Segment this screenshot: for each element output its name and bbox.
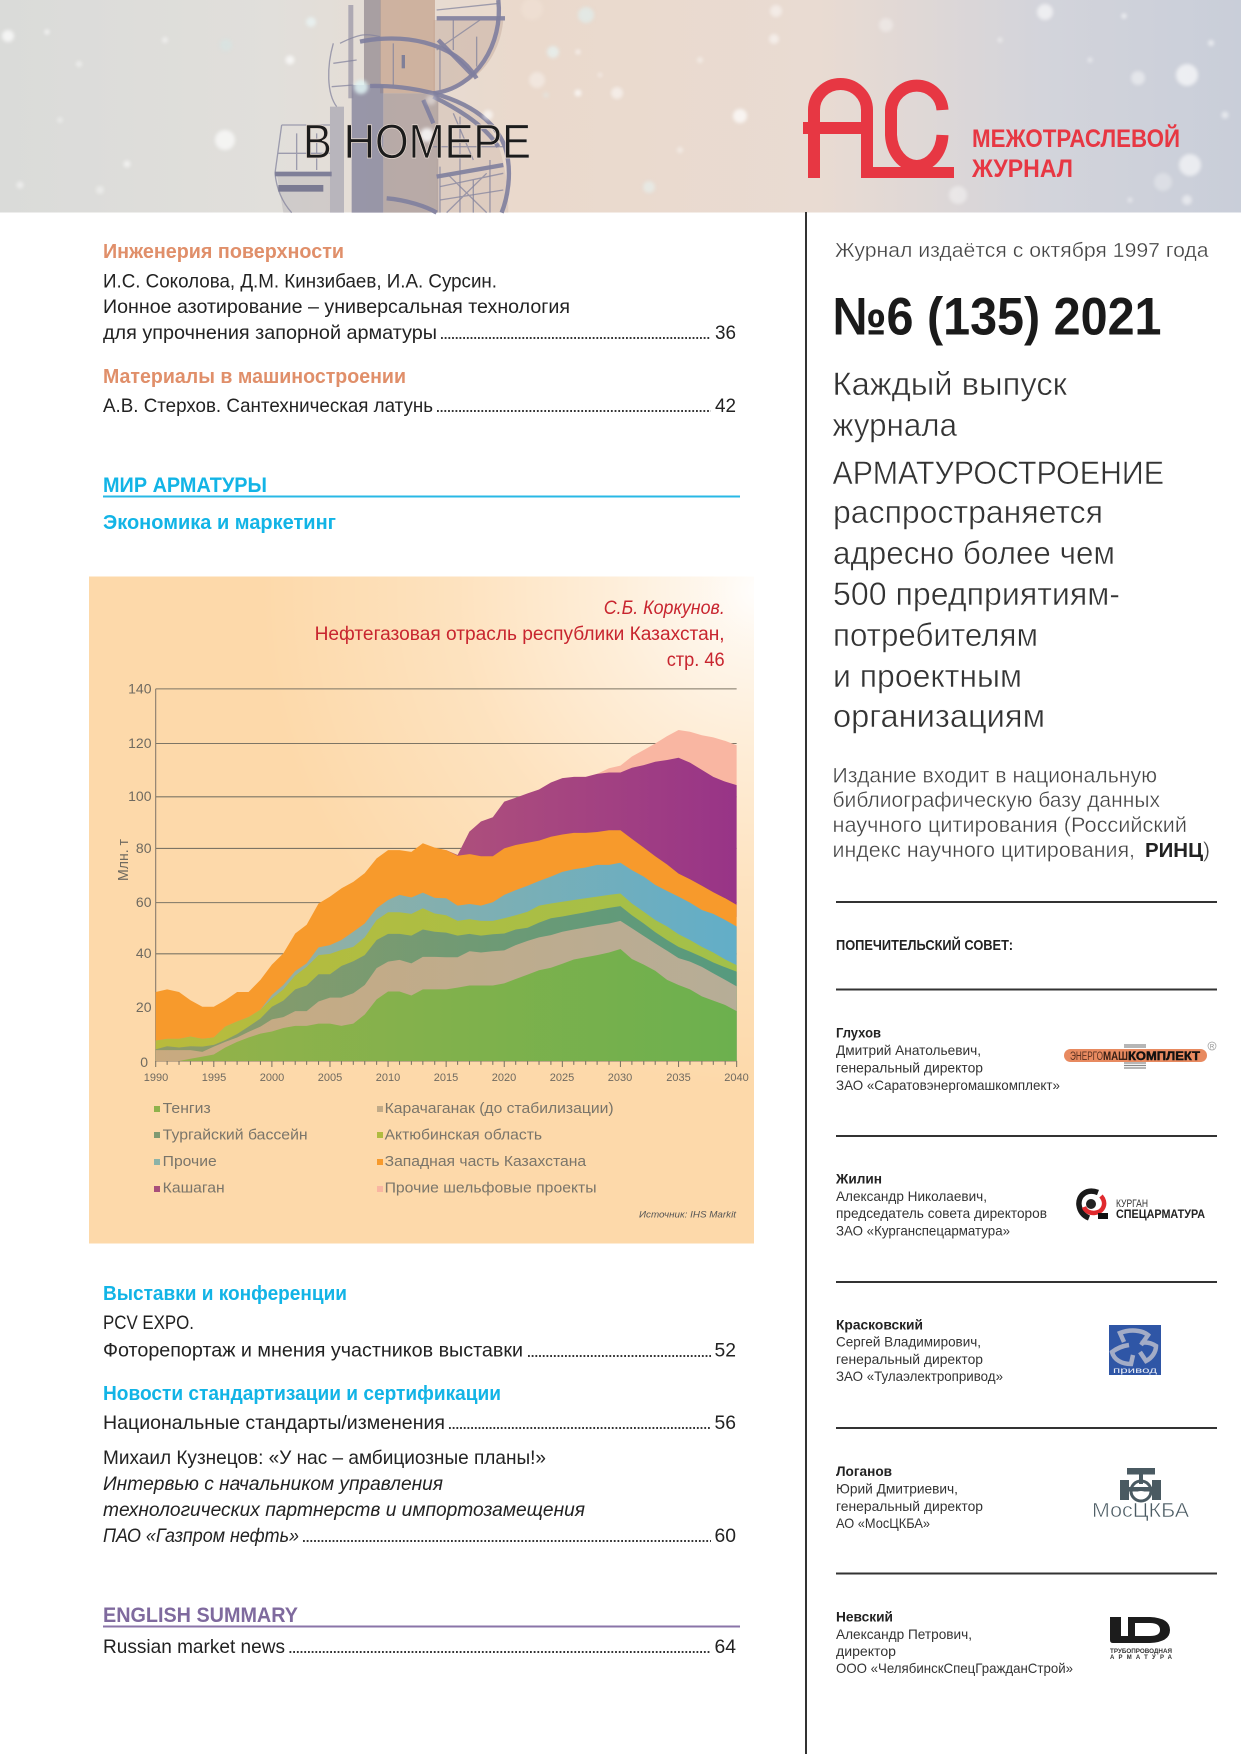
- board member: Логанов: Логанов: [836, 1463, 892, 1479]
- board member: Глухов: ЗАО «Саратовэнергомашкомплект»: [836, 1077, 1060, 1093]
- chart caption: Нефтегазовая отрасль республики Казахстан,: [315, 624, 725, 645]
- chart legend: [154, 1100, 614, 1197]
- logo: МосЦКБА: [1092, 1468, 1190, 1522]
- series: актюбинская область: [156, 894, 737, 1061]
- x axis labels: 1995: [202, 1072, 226, 1084]
- chart legend: Прочие: [163, 1153, 217, 1170]
- contents: Инженерия поверхности: Инженерия поверхности: [103, 241, 344, 263]
- board member: Логанов: Юрий Дмитриевич,: [836, 1480, 958, 1496]
- section: English summary: ENGLISH SUMMARY: [103, 1604, 298, 1627]
- y axis labels: Млн. т: [116, 839, 132, 881]
- contents: Инженерия поверхности: [103, 241, 736, 344]
- right column: since 1997: Журнал издаётся с октября 1997 года: [835, 240, 1210, 262]
- x axis labels: 2040: [724, 1072, 749, 1084]
- logo: Курган Спецарматура: КУРГАН: [1116, 1198, 1148, 1210]
- board member: Невский: Александр Петрович,: [836, 1626, 972, 1642]
- contents: Инженерия поверхности: Ионное азотирование – универсальная технология: [103, 296, 570, 318]
- chart legend: Кашаган: [163, 1180, 225, 1197]
- logo caption: ЖУРНАЛ: [971, 155, 1073, 183]
- RINC statement: ): [1203, 839, 1210, 862]
- subheading: Экономика и маркетинг: Экономика и маркетинг: [103, 512, 336, 534]
- board member: Глухов: Глухов: [836, 1025, 881, 1041]
- logo: Энергомашкомплект: ЭНЕРГО: [1070, 1051, 1103, 1063]
- board member: Красковский: [836, 1316, 1003, 1384]
- logo caption: МЕЖОТРАСЛЕВОЙ: [972, 123, 1180, 153]
- board member: Логанов: [836, 1463, 983, 1531]
- y axis labels: 80: [136, 840, 152, 856]
- contents: Выставки и конференции: Выставки и конференции: [103, 1283, 347, 1305]
- board member: Красковский: генеральный директор: [836, 1351, 983, 1367]
- y axis labels: 140: [128, 680, 152, 696]
- chart legend: Тенгиз: [163, 1100, 211, 1117]
- contents: Выставки и конференции: PCV EXPO.: [103, 1312, 194, 1334]
- chart caption: [315, 598, 725, 671]
- board heading: ПОПЕЧИТЕЛЬСКИЙ СОВЕТ:: [836, 936, 1013, 954]
- issue number: №6 (135) 2021: [832, 288, 1162, 347]
- logo: Энергомашкомплект: [1064, 1042, 1216, 1068]
- board member: Глухов: генеральный директор: [836, 1060, 983, 1076]
- section heading: Мир арматуры: МИР АРМАТУРЫ: [103, 474, 267, 497]
- board member: Невский: Невский: [836, 1609, 893, 1625]
- board member: Жилин: [835, 1171, 1047, 1239]
- board member: Глухов: Дмитрий Анатольевич,: [836, 1042, 981, 1058]
- series: западная часть Казахстана: [156, 830, 737, 1061]
- board member: Жилин: председатель совета директоров: [836, 1205, 1047, 1221]
- contents: Новости стандартизации и сертификации: [103, 1383, 736, 1547]
- logo: LD Трубопроводная арматура: ТРУБОПРОВОДНАЯ: [1110, 1648, 1172, 1655]
- contents: Новости стандартизации и сертификации: 60: [714, 1525, 736, 1547]
- y axis labels: 20: [136, 999, 152, 1015]
- RINC statement: РИНЦ: [1145, 840, 1203, 862]
- x axis labels: 2030: [608, 1072, 632, 1084]
- distribution statement: АРМАТУРОСТРОЕНИЕ: [832, 455, 1164, 491]
- tower photo: [275, 0, 509, 213]
- logo: LD Трубопроводная арматура: [1110, 1617, 1173, 1661]
- distribution statement: 500 предприятиям-: [833, 576, 1120, 612]
- logo: Курган Спецарматура: [1079, 1191, 1205, 1221]
- RINC statement: научного цитирования (Российский: [832, 814, 1187, 837]
- section: English summary: [103, 1604, 740, 1658]
- chart legend: Западная часть Казахстана: [385, 1153, 587, 1170]
- contents: Инженерия поверхности: И.С. Соколова, Д.М. Кинзибаев, И.А. Сурсин.: [103, 270, 497, 292]
- board member: Жилин: Жилин: [835, 1171, 882, 1187]
- section: English summary: Russian market news: [103, 1636, 285, 1658]
- x axis labels: 2010: [376, 1072, 400, 1084]
- contents: Материалы в машиностроении: А.В. Стерхов. Сантехническая латунь: [103, 395, 433, 417]
- contents: Инженерия поверхности: 36: [715, 322, 736, 344]
- y axis labels: 60: [136, 894, 152, 910]
- logo caption: [971, 123, 1180, 183]
- plot areas: [156, 689, 737, 1067]
- contents: Выставки и конференции: [103, 1283, 736, 1362]
- board member: Жилин: ЗАО «Курганспецарматура»: [836, 1223, 1010, 1239]
- column divider: [805, 212, 807, 1754]
- x axis labels: 2020: [492, 1072, 516, 1084]
- chart panel: [89, 576, 754, 1244]
- logo: Энергомашкомплект: МАШ: [1103, 1051, 1128, 1063]
- contents: Материалы в машиностроении: [103, 366, 736, 417]
- logo: Привод: привод: [1113, 1365, 1157, 1375]
- board member: Жилин: Александр Николаевич,: [836, 1188, 987, 1204]
- contents: Новости стандартизации и сертификации: 56: [714, 1412, 736, 1434]
- RINC statement: индекс научного цитирования,: [832, 839, 1135, 862]
- series: тургайский бассейн: [156, 906, 737, 1061]
- series: тенгиз: [156, 949, 737, 1061]
- RINC statement: Издание входит в национальную: [832, 765, 1157, 788]
- board member: Красковский: ЗАО «Тулаэлектропривод»: [836, 1368, 1003, 1384]
- x axis labels: 2035: [666, 1072, 691, 1084]
- board member: Невский: ООО «ЧелябинскСпецГражданСтрой»: [836, 1660, 1073, 1676]
- board member: Невский: [836, 1609, 1073, 1676]
- chart legend: Актюбинская область: [385, 1126, 542, 1143]
- x axis labels: [144, 1072, 749, 1084]
- board member: Невский: директор: [836, 1643, 896, 1659]
- contents: Новости стандартизации и сертификации: Национальные стандарты/изменения: [103, 1412, 445, 1434]
- board member: Красковский: Сергей Владимирович,: [836, 1334, 981, 1350]
- distribution statement: организациям: [833, 698, 1045, 734]
- x axis labels: 2025: [550, 1072, 574, 1084]
- y axis labels: 100: [128, 788, 152, 804]
- x axis labels: 1990: [144, 1072, 168, 1084]
- logo: Курган Спецарматура: СПЕЦАРМАТУРА: [1116, 1207, 1205, 1221]
- chart caption: стр. 46: [667, 650, 725, 671]
- bokeh snow: [2, 0, 1228, 205]
- distribution statement: потребителям: [833, 617, 1038, 653]
- x axis labels: 2015: [434, 1072, 458, 1084]
- RINC statement: [832, 765, 1210, 862]
- series: прочие шельфовые проекты: [574, 730, 737, 830]
- contents: Выставки и конференции: 52: [714, 1340, 736, 1362]
- contents: Материалы в машиностроении: 42: [715, 395, 736, 417]
- contents: Новости стандартизации и сертификации: технологических партнерств и импортозамещения: [103, 1499, 586, 1521]
- x axis labels: 2000: [260, 1072, 284, 1084]
- logo: МосЦКБА: МосЦКБА: [1092, 1500, 1190, 1522]
- distribution statement: Каждый выпуск: [832, 366, 1068, 402]
- series: карачаганак: [156, 921, 737, 1061]
- contents: Новости стандартизации и сертификации: Новости стандартизации и сертификации: [103, 1383, 501, 1405]
- chart caption: С.Б. Коркунов.: [604, 598, 725, 619]
- distribution statement: адресно более чем: [833, 535, 1115, 571]
- y axis labels: 120: [128, 735, 152, 751]
- contents: Новости стандартизации и сертификации: Михаил Кузнецов: «У нас – амбициозные планы!»: [103, 1447, 546, 1469]
- contents: Новости стандартизации и сертификации: Интервью с начальником управления: [103, 1473, 444, 1495]
- distribution statement: распространяется: [833, 494, 1103, 530]
- chart source: Источник: IHS Markit: [639, 1210, 736, 1220]
- RINC statement: библиографическую базу данных: [832, 789, 1160, 812]
- logo: Энергомашкомплект: R: [1210, 1044, 1215, 1050]
- board member: Глухов: [836, 1025, 1060, 1093]
- logo: Энергомашкомплект: КОМПЛЕКТ: [1128, 1051, 1200, 1063]
- series: кашаган: [446, 758, 737, 917]
- distribution statement: [832, 366, 1164, 734]
- header banner: [0, 0, 1241, 213]
- distribution statement: и проектным: [833, 658, 1022, 694]
- area chart: [116, 680, 749, 1084]
- contents: Новости стандартизации и сертификации: ПАО «Газпром нефть»: [103, 1525, 299, 1547]
- y axis labels: 40: [136, 945, 152, 961]
- series: прочие: [156, 863, 737, 1061]
- contents: Выставки и конференции: Фоторепортаж и мнения участников выставки: [103, 1340, 523, 1362]
- logo: AC: [803, 84, 954, 178]
- contents: Инженерия поверхности: для упрочнения запорной арматуры: [103, 322, 437, 344]
- chart legend: Карачаганак (до стабилизации): [385, 1100, 614, 1117]
- y axis labels: [116, 680, 152, 1070]
- board member: Красковский: Красковский: [836, 1316, 923, 1332]
- board member: Логанов: АО «МосЦКБА»: [836, 1515, 930, 1531]
- board member: Логанов: генеральный директор: [836, 1498, 983, 1514]
- distribution statement: журнала: [832, 407, 957, 443]
- logo: Привод: [1109, 1325, 1161, 1375]
- chart legend: Тургайский бассейн: [163, 1126, 308, 1143]
- x axis labels: 2005: [318, 1072, 342, 1084]
- y axis labels: 0: [140, 1054, 148, 1070]
- section: English summary: 64: [714, 1636, 736, 1658]
- chart legend: Прочие шельфовые проекты: [385, 1180, 597, 1197]
- contents: Материалы в машиностроении: Материалы в машиностроении: [103, 366, 406, 388]
- title: В НОМЕРЕ: [303, 116, 531, 169]
- logo: LD Трубопроводная арматура: АРМАТУРА: [1110, 1655, 1173, 1661]
